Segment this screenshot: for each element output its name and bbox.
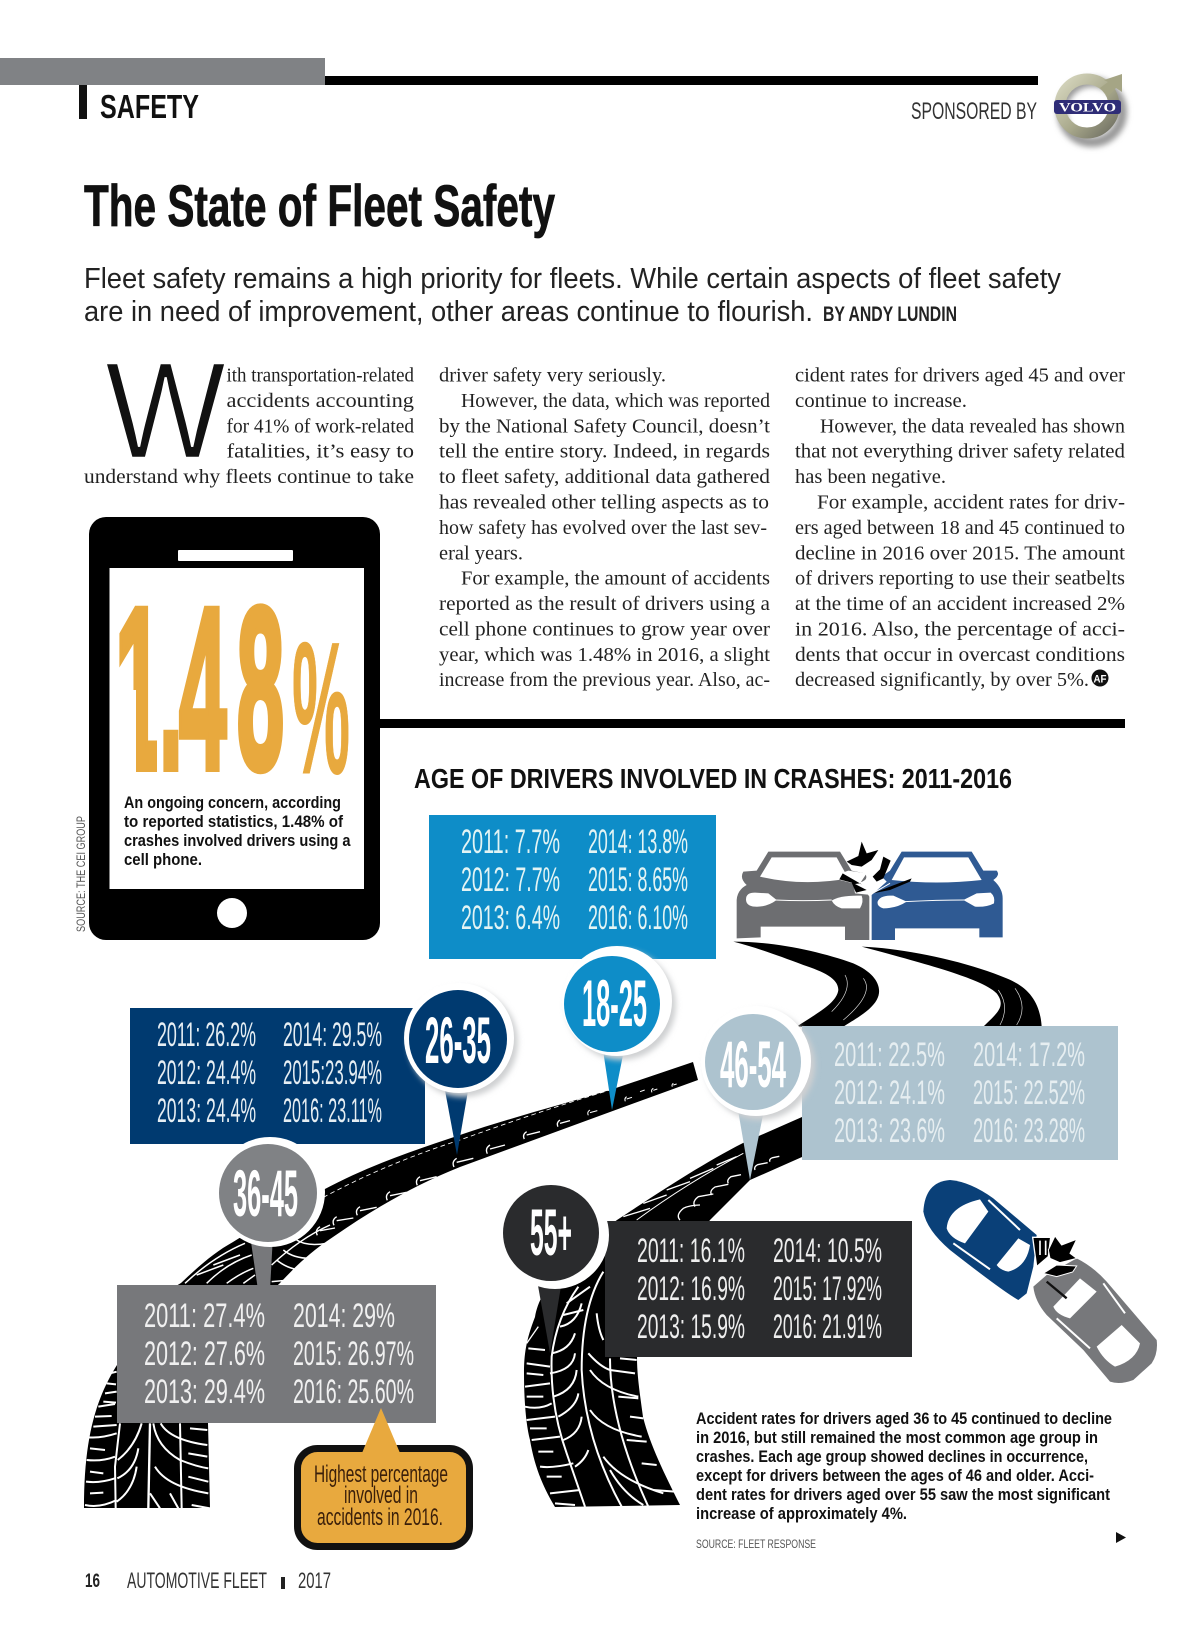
panel: age 18-25: 2012: 7.7% [461,861,560,899]
impact burst [839,842,912,895]
panel: age 26-35: 2015:23.94% [283,1054,382,1092]
pin: 18-25: 18-25 [582,966,647,1040]
article column 2: However, the data, which was reported [461,390,770,412]
panel: age 26-35 [130,1008,425,1144]
title: The State of Fleet Safety [84,174,555,239]
tyre tread: lower left [85,1372,210,1508]
article column 3: decreased significantly, by over 5%. [795,669,1089,691]
road one: tyre track from front crash to lower left [84,942,879,1508]
big statistic: .48 [159,560,284,817]
grey car [737,852,869,940]
panel: age 18-25: 2011: 7.7% [461,823,560,861]
pin: 26-35 [404,983,518,1155]
article column 1 with drop cap: understand why fleets continue to take [84,466,414,488]
sponsor credit: SPONSORED BY [911,98,1037,125]
panel: age 55+: 2012: 16.9% [637,1270,745,1308]
deck and byline: Fleet safety remains a high priority for fleets. While certain aspects of fleet safety [84,263,1061,295]
phone graphic with cell phone statistic [89,517,380,940]
chart source note: SOURCE: FLEET RESPONSE [696,1537,816,1551]
panel: age 36-45: 2016: 25.60% [293,1373,414,1411]
article column 2: driver safety very seriously. [439,365,666,387]
panel: age 46-54: 2011: 22.5% [834,1036,945,1074]
icon: end mark: AF [1094,674,1107,686]
callout: highest percentage: Highest percentage [314,1461,448,1488]
summary paragraph: crashes. Each age group showed declines in occurrence, [696,1447,1088,1466]
road two: tyre track from front crash to lower centre [524,947,1042,1507]
article column 3 [795,365,1125,691]
deck and byline [84,263,1061,328]
article column 3: at the time of an accident increased 2% [795,593,1125,615]
panel: age 26-35: 2011: 26.2% [157,1016,256,1054]
impact burst [1033,1236,1077,1277]
road one upper bend [733,942,879,1027]
panel: age 26-35: 2016: 23.11% [283,1092,382,1130]
chart heading: AGE OF DRIVERS INVOLVED IN CRASHES: 2011-2016 [414,763,1012,794]
callout: highest percentage: accidents in 2016. [317,1504,443,1531]
panel: age 55+: 2015: 17.92% [773,1270,882,1308]
article column 1 with drop cap: for 41% of work-related [226,415,414,437]
tyre tread: lower centre [525,1272,675,1507]
article column 2: cell phone continues to grow year over [439,618,770,640]
panel: age 46-54: 2013: 23.6% [834,1112,945,1150]
summary paragraph: increase of approximately 4%. [696,1504,907,1523]
summary paragraph [696,1409,1112,1523]
article column 3: However, the data revealed has shown [820,415,1125,437]
article column 2: reported as the result of drivers using a [439,593,770,615]
callout: highest percentage [298,1408,470,1546]
article column 3: decline in 2016 over 2015. The amount [795,542,1125,564]
panel: age 18-25: 2014: 13.8% [588,823,688,861]
footer: 16 [85,1571,100,1592]
pin: 18-25 [562,946,676,1110]
panel: age 18-25: 2015: 8.65% [588,861,688,899]
section label: safety: SAFETY [100,88,199,125]
section label: safety [79,85,199,125]
section rule [380,719,1125,728]
phone source note: SOURCE: THE CEI GROUP [76,816,88,932]
tyre tread: middle [316,1083,677,1235]
pin: 36-45: 36-45 [233,1156,298,1230]
panel: age 55+: 2014: 10.5% [773,1232,882,1270]
article column 1 with drop cap: fatalities, it’s easy to [226,441,414,463]
panel: age 36-45: 2012: 27.6% [144,1335,265,1373]
article column 2: For example, the amount of accidents [461,568,770,590]
summary paragraph: in 2016, but still remained the most common age group in [696,1428,1098,1447]
pin: 36-45 [215,1137,325,1290]
article column 2 [439,365,770,691]
article column 2: has revealed other telling aspects as to [439,492,769,514]
article column 3: cident rates for drivers aged 45 and over [795,365,1125,387]
footer: 2017 [298,1568,331,1593]
article column 1 with drop cap [84,334,414,488]
article column 3: of drivers reporting to use their seatbelts [795,568,1125,590]
panel: age 55+: 2011: 16.1% [637,1232,745,1270]
phone caption: An ongoing concern, according [124,793,341,812]
summary paragraph: dent rates for drivers aged over 55 saw the most significant [696,1485,1110,1504]
tyre tread: upper centre [623,1153,779,1220]
summary paragraph: except for drivers between the ages of 46 and older. Acci- [696,1466,1094,1485]
panel: age 55+: 2013: 15.9% [637,1308,745,1346]
tyre tread: upper left [185,1225,330,1283]
article column 2: increase from the previous year. Also, ac- [439,669,770,691]
article column 2: year, which was 1.48% in 2016, a slight [439,644,770,666]
panel: age 36-45: 2013: 29.4% [144,1373,265,1411]
pin: 26-35: 26-35 [425,1003,491,1077]
icon: volvo logo: VOLVO [1059,100,1116,114]
icon: volvo logo [1054,74,1122,142]
article column 2: tell the entire story. Indeed, in regards [439,441,770,463]
pin: 55+: 55+ [530,1195,572,1269]
article column 2: by the National Safety Council, doesn’t [439,415,770,437]
article column 1 with drop cap: accidents accounting [226,390,414,412]
panel: age 36-45: 2011: 27.4% [144,1297,265,1335]
icon: side-on car crash [923,1180,1157,1383]
panel: age 26-35: 2012: 24.4% [157,1054,256,1092]
panel: age 55+: 2016: 21.91% [773,1308,882,1346]
header band [0,58,1038,85]
deck and byline: are in need of improvement, other areas continue to flourish. [84,296,813,328]
arrow: continue marker [1116,1532,1126,1543]
article column 3: in 2016. Also, the percentage of acci- [795,618,1125,640]
icon: front-on car crash [737,842,1003,940]
article column 2: to fleet safety, additional data gathered [439,466,770,488]
callout: highest percentage: involved in [344,1482,418,1509]
panel: age 18-25: 2016: 6.10% [588,899,688,937]
article column 1 with drop cap: W [105,334,226,488]
article column 2: how safety has evolved over the last sev- [439,517,767,539]
article column 2: eral years. [439,542,523,564]
deck and byline: BY ANDY LUNDIN [823,303,957,326]
road two upper bend [862,947,1042,1027]
summary paragraph: Accident rates for drivers aged 36 to 45 continued to decline [696,1409,1112,1428]
article column 1 with drop cap: ith transportation-related [226,365,414,387]
pin: 55+ [501,1181,609,1353]
article column 3: has been negative. [795,466,946,488]
phone caption [124,793,351,869]
panel: age 55+ [605,1221,912,1357]
big statistic: 1 [115,560,162,817]
panel: age 46-54 [802,1026,1118,1160]
article column 3: that not everything driver safety related [795,441,1125,463]
article column 3: continue to increase. [795,390,967,412]
blue car [872,852,1003,940]
panel: age 26-35: 2014: 29.5% [283,1016,382,1054]
panel: age 36-45: 2014: 29% [293,1297,395,1335]
phone graphic with cell phone statistic: % [292,603,350,813]
article column 3: For example, accident rates for driv- [817,492,1125,514]
article column 3: ers aged between 18 and 45 continued to [795,517,1125,539]
phone caption: crashes involved drivers using a [124,831,351,850]
panel: age 46-54: 2015: 22.52% [973,1074,1085,1112]
panel: age 36-45: 2015: 26.97% [293,1335,414,1373]
panel: age 18-25: 2013: 6.4% [461,899,560,937]
phone caption: to reported statistics, 1.48% of [124,812,343,831]
panel: age 18-25 [429,815,716,959]
phone caption: cell phone. [124,850,202,869]
pin: 46-54 [701,1006,815,1180]
article column 3: dents that occur in overcast conditions [795,644,1125,666]
panel: age 36-45 [117,1285,436,1423]
blue car [923,1180,1037,1300]
pin: 46-54: 46-54 [720,1027,786,1101]
grey car [1033,1258,1157,1383]
panel: age 26-35: 2013: 24.4% [157,1092,256,1130]
panel: age 46-54: 2012: 24.1% [834,1074,945,1112]
footer: AUTOMOTIVE FLEET [127,1568,267,1593]
big statistic [119,603,348,775]
panel: age 46-54: 2016: 23.28% [973,1112,1085,1150]
icon: end mark [1092,670,1108,686]
panel: age 46-54: 2014: 17.2% [973,1036,1085,1074]
